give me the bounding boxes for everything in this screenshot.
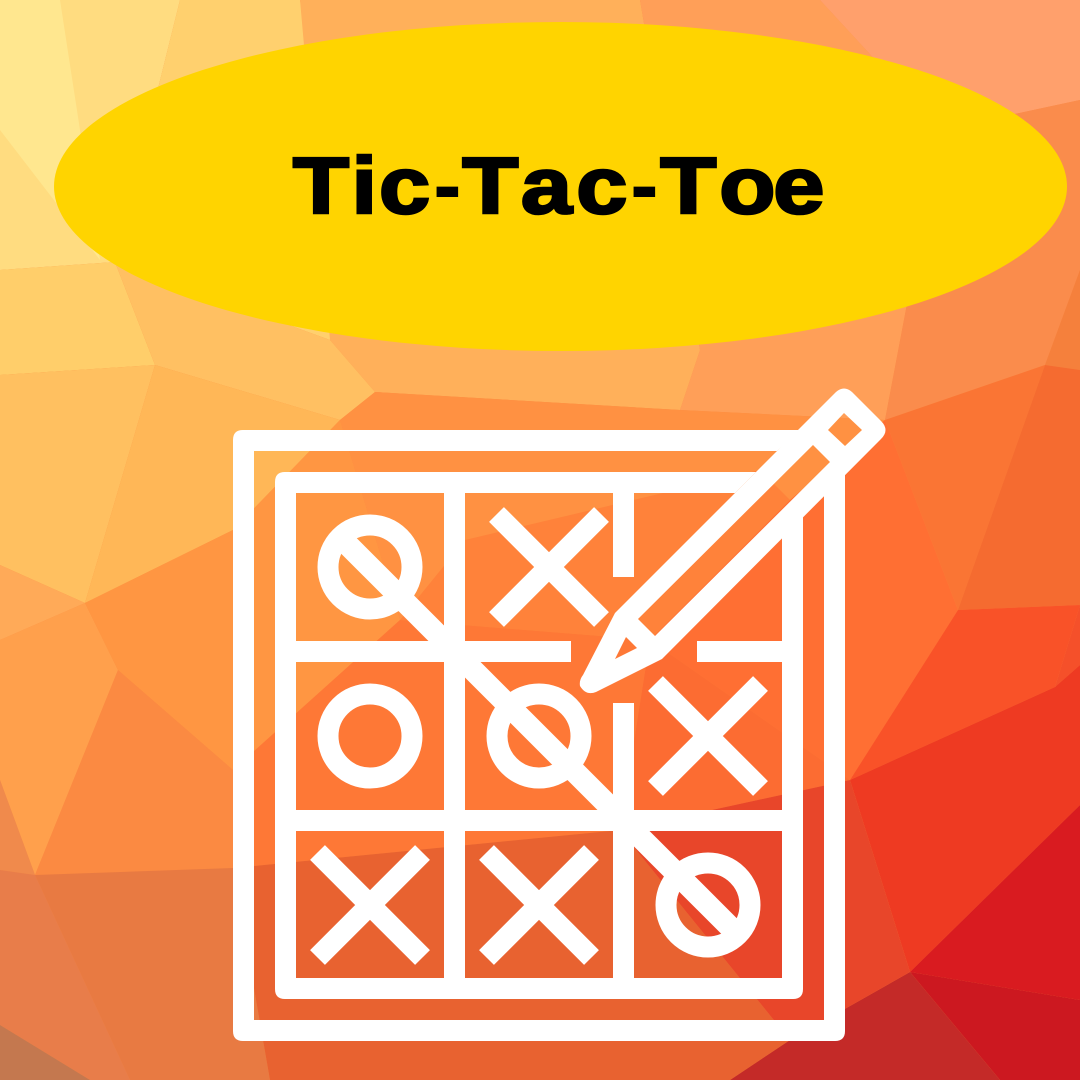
inner board frame [275, 472, 803, 999]
title text: - [632, 153, 656, 222]
title text: Tic [293, 142, 430, 231]
outer paper frame [233, 430, 845, 1041]
grid lines [296, 493, 782, 978]
title text: Tac [462, 142, 627, 231]
icon: tic-tac-toe board with pencil [233, 388, 886, 1041]
icon: pencil [580, 388, 886, 693]
title text: - [436, 153, 459, 222]
title banner: yellow ellipse [54, 22, 1067, 351]
noughts [328, 525, 750, 947]
crosses [318, 514, 760, 958]
winning diagonal line [345, 542, 733, 930]
title text: Toe [660, 142, 824, 231]
